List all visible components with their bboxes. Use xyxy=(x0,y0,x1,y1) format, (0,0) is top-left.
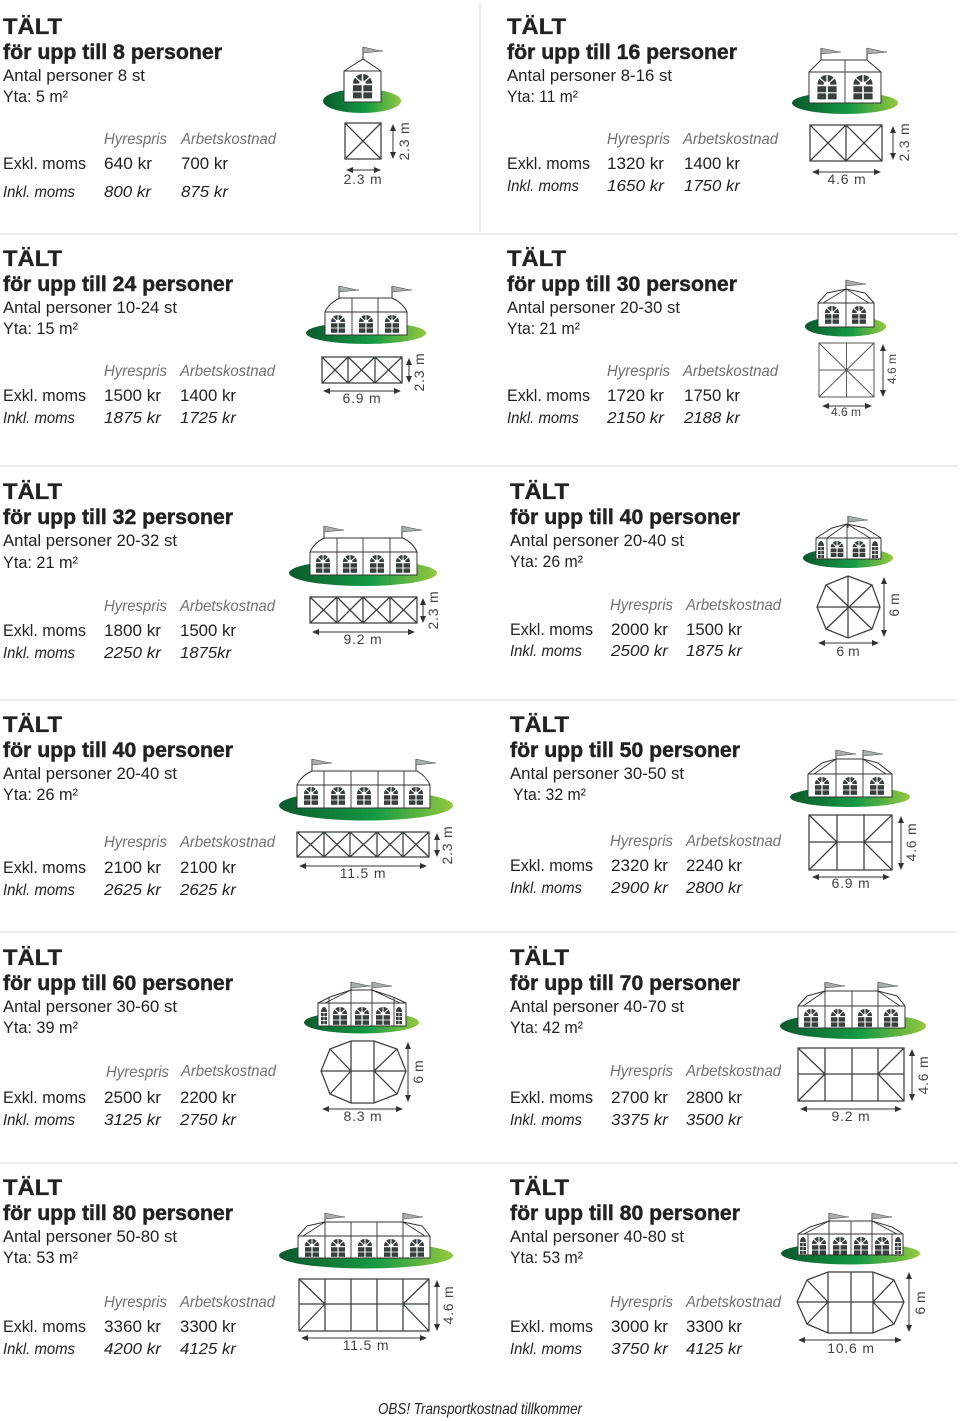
heading: för upp till 30 personer xyxy=(507,273,737,296)
icon: tent xyxy=(279,759,453,820)
floor plan xyxy=(299,1279,456,1353)
price table: Inkl. moms xyxy=(507,178,579,195)
floor plan xyxy=(322,352,427,406)
details: Antal personer 20-32 st xyxy=(3,531,177,550)
details: Yta: 39 m² xyxy=(3,1018,78,1037)
details: Yta: 26 m² xyxy=(3,785,78,804)
price table: Exkl. moms xyxy=(510,856,593,875)
price table: 1500 kr xyxy=(104,386,161,405)
details: Yta: 42 m² xyxy=(510,1018,583,1037)
price table xyxy=(510,1063,782,1129)
heading xyxy=(3,246,233,296)
price table: Hyrespris xyxy=(607,131,670,148)
price table: Arbetskostnad xyxy=(685,1294,782,1311)
icon: tent xyxy=(306,286,426,344)
price table xyxy=(3,1294,276,1358)
price table: Inkl. moms xyxy=(510,1341,582,1358)
price table: Exkl. moms xyxy=(3,621,86,640)
heading: för upp till 70 personer xyxy=(510,972,740,995)
price table: 3500 kr xyxy=(686,1112,743,1129)
heading xyxy=(3,479,233,529)
price table: Exkl. moms xyxy=(507,154,590,173)
price table: 2100 kr xyxy=(104,858,161,877)
details xyxy=(3,298,177,338)
price table: Arbetskostnad xyxy=(179,834,276,851)
heading xyxy=(507,246,737,296)
floor plan: 6.9 m xyxy=(342,390,382,406)
price table: Hyrespris xyxy=(104,363,167,380)
price table: 2200 kr xyxy=(180,1088,236,1107)
price table: Hyrespris xyxy=(104,834,167,851)
details: Antal personer 8-16 st xyxy=(507,66,672,85)
price table: 1720 kr xyxy=(607,386,664,405)
floor plan: 11.5 m xyxy=(343,1337,389,1353)
price table: 1725 kr xyxy=(180,410,237,427)
price table: 2188 kr xyxy=(683,410,741,427)
price table: Hyrespris xyxy=(607,363,670,380)
floor plan: 9.2 m xyxy=(343,631,383,647)
panel: tent for 8 persons xyxy=(3,14,412,201)
price table: Exkl. moms xyxy=(3,858,86,877)
panel: tent for 16 persons xyxy=(507,14,912,195)
price table: 2500 kr xyxy=(610,643,669,660)
price table xyxy=(3,363,276,427)
price table xyxy=(510,1294,782,1358)
floor plan: 2.3 m xyxy=(343,171,383,187)
floor plan: 6 m xyxy=(912,1291,928,1315)
heading: TÄLT xyxy=(507,14,567,39)
price table: Exkl. moms xyxy=(3,386,86,405)
details xyxy=(3,531,177,572)
price table xyxy=(507,363,779,427)
heading xyxy=(3,712,233,762)
price table: Arbetskostnad xyxy=(682,131,779,148)
floor plan: 8.3 m xyxy=(343,1108,383,1124)
details: Antal personer 30-60 st xyxy=(3,997,177,1016)
price table: Arbetskostnad xyxy=(682,363,779,380)
price table: 800 kr xyxy=(104,184,152,201)
footnote: OBS! Transportkostnad tillkommer xyxy=(378,1401,583,1418)
panel: tent for 40 persons, long xyxy=(3,712,455,899)
panel: tent for 80 persons, long xyxy=(3,1175,456,1358)
details: Antal personer 10-24 st xyxy=(3,298,177,317)
details: Antal personer 40-80 st xyxy=(510,1227,684,1246)
details: Antal personer 20-30 st xyxy=(507,298,680,317)
price table: Arbetskostnad xyxy=(180,1063,277,1080)
details: Antal personer 50-80 st xyxy=(3,1227,177,1246)
price table: 4200 kr xyxy=(104,1341,162,1358)
price table: 2500 kr xyxy=(104,1088,161,1107)
floor plan xyxy=(810,122,912,187)
floor plan: 9.2 m xyxy=(831,1108,871,1124)
price table: Exkl. moms xyxy=(510,620,593,639)
price table: Inkl. moms xyxy=(510,1112,582,1129)
details xyxy=(3,1227,177,1267)
heading: för upp till 40 personer xyxy=(3,739,233,762)
price table: 3125 kr xyxy=(104,1112,162,1129)
price table: 4125 kr xyxy=(686,1341,743,1358)
heading: för upp till 40 personer xyxy=(510,506,740,529)
panel: tent for 60 persons xyxy=(3,945,426,1129)
heading: för upp till 50 personer xyxy=(510,739,740,762)
floor plan xyxy=(809,815,919,891)
floor plan: 2.3 m xyxy=(411,352,427,392)
price table: 2900 kr xyxy=(610,880,669,897)
price table: 1800 kr xyxy=(104,621,161,640)
floor plan xyxy=(797,1272,928,1356)
price table: Hyrespris xyxy=(104,598,167,615)
details: Yta: 11 m² xyxy=(507,87,578,106)
price table: 2625 kr xyxy=(103,882,162,899)
details: Yta: 32 m² xyxy=(513,785,586,804)
price table: Hyrespris xyxy=(610,1063,673,1080)
price table: Exkl. moms xyxy=(510,1088,593,1107)
price table: 1650 kr xyxy=(607,178,665,195)
floor plan: 6 m xyxy=(886,593,902,617)
price table: Hyrespris xyxy=(104,131,167,148)
price table: 2320 kr xyxy=(611,856,668,875)
heading: för upp till 32 personer xyxy=(3,506,233,529)
price table xyxy=(510,597,782,660)
floor plan: 6 m xyxy=(836,643,860,659)
price table: 1500 kr xyxy=(180,621,236,640)
price table: Inkl. moms xyxy=(3,184,75,201)
panel: tent for 40 persons, round xyxy=(510,479,902,660)
price table: Inkl. moms xyxy=(3,1112,75,1129)
price table: Exkl. moms xyxy=(3,154,86,173)
details xyxy=(510,997,684,1037)
price table: 640 kr xyxy=(104,154,152,173)
heading xyxy=(510,945,740,995)
floor plan: 2.3 m xyxy=(439,825,455,865)
price table: Hyrespris xyxy=(104,1294,167,1311)
price table: Inkl. moms xyxy=(3,645,75,662)
price table: Inkl. moms xyxy=(510,643,582,660)
price table: Exkl. moms xyxy=(3,1317,86,1336)
icon: tent xyxy=(289,526,437,586)
details: Yta: 21 m² xyxy=(507,319,580,338)
price table: 875 kr xyxy=(181,184,229,201)
heading: TÄLT xyxy=(3,14,63,39)
price table: Inkl. moms xyxy=(3,1341,75,1358)
panel: tent for 70 persons xyxy=(510,945,931,1129)
icon: tent xyxy=(780,982,926,1039)
heading: TÄLT xyxy=(510,945,570,970)
heading xyxy=(3,1175,233,1225)
floor plan xyxy=(310,590,441,647)
heading: TÄLT xyxy=(510,1175,570,1200)
heading: TÄLT xyxy=(510,479,570,504)
icon: tent xyxy=(781,1213,920,1264)
floor plan: 2.3 m xyxy=(425,590,441,630)
floor plan: 4.6 m xyxy=(885,354,899,384)
price table: Arbetskostnad xyxy=(685,597,782,614)
heading: TÄLT xyxy=(507,246,567,271)
price table: Inkl. moms xyxy=(510,880,582,897)
floor plan: 4.6 m xyxy=(827,171,867,187)
floor plan: 4.6 m xyxy=(903,822,919,862)
details: Antal personer 8 st xyxy=(3,66,145,85)
heading: TÄLT xyxy=(3,945,63,970)
details: Yta: 26 m² xyxy=(510,552,583,571)
heading xyxy=(510,712,740,762)
price table: 1750 kr xyxy=(684,178,741,195)
floor plan: 10.6 m xyxy=(827,1340,875,1356)
floor plan xyxy=(819,343,899,419)
price table: Exkl. moms xyxy=(510,1317,593,1336)
details xyxy=(3,764,177,804)
heading: för upp till 24 personer xyxy=(3,273,233,296)
panel: tent for 80 persons, oval xyxy=(510,1175,928,1358)
price table: 2700 kr xyxy=(611,1088,668,1107)
details: Antal personer 40-70 st xyxy=(510,997,684,1016)
price table: Inkl. moms xyxy=(507,410,579,427)
panel: tent for 32 persons xyxy=(3,479,441,662)
heading: för upp till 16 personer xyxy=(507,41,737,64)
heading xyxy=(510,479,740,529)
floor plan xyxy=(798,1048,931,1124)
price table: Hyrespris xyxy=(610,1294,673,1311)
details xyxy=(3,997,177,1037)
details: Yta: 21 m² xyxy=(3,553,78,572)
price table: 2750 kr xyxy=(179,1112,237,1129)
details: Yta: 5 m² xyxy=(3,87,68,106)
price table: Arbetskostnad xyxy=(685,833,782,850)
price table: 2100 kr xyxy=(180,858,236,877)
floor plan: 2.3 m xyxy=(396,121,412,161)
price table: 2800 kr xyxy=(686,1088,742,1107)
details xyxy=(510,531,684,571)
details: Antal personer 30-50 st xyxy=(510,764,684,783)
floor plan xyxy=(297,825,455,881)
price table: Arbetskostnad xyxy=(685,1063,782,1080)
details xyxy=(510,1227,684,1267)
icon: tent xyxy=(792,48,898,114)
details: Antal personer 20-40 st xyxy=(3,764,177,783)
details: Yta: 53 m² xyxy=(3,1248,78,1267)
panel: tent for 30 persons xyxy=(507,246,899,427)
price table: 3300 kr xyxy=(686,1317,742,1336)
heading: TÄLT xyxy=(3,712,63,737)
floor plan xyxy=(321,1041,426,1124)
price table: 1400 kr xyxy=(684,154,740,173)
price table: 2000 kr xyxy=(611,620,668,639)
floor plan: 4.6 m xyxy=(440,1285,456,1325)
price table: 3375 kr xyxy=(611,1112,669,1129)
price table: 1875kr xyxy=(180,645,232,662)
floor plan: 4.6 m xyxy=(915,1055,931,1095)
heading: för upp till 80 personer xyxy=(510,1202,740,1225)
heading: för upp till 8 personer xyxy=(3,41,222,64)
price table: 3300 kr xyxy=(180,1317,236,1336)
details xyxy=(507,298,680,338)
heading: för upp till 60 personer xyxy=(3,972,233,995)
price table xyxy=(3,131,277,201)
floor plan: 6.9 m xyxy=(831,875,871,891)
price table: 2150 kr xyxy=(606,410,665,427)
icon: tent xyxy=(803,516,893,568)
floor plan: 4.6 m xyxy=(831,405,861,419)
price table: 1400 kr xyxy=(180,386,236,405)
price table: Inkl. moms xyxy=(3,410,75,427)
price table: 1875 kr xyxy=(104,410,162,427)
price table: Arbetskostnad xyxy=(180,131,277,148)
price table: 1750 kr xyxy=(684,386,740,405)
icon: tent xyxy=(323,47,401,113)
price table: 4125 kr xyxy=(180,1341,237,1358)
price table: 2240 kr xyxy=(686,856,742,875)
price table: Hyrespris xyxy=(610,597,673,614)
price table xyxy=(510,833,782,897)
panel: tent for 24 persons xyxy=(3,246,427,427)
price table: Arbetskostnad xyxy=(179,363,276,380)
price table: 3750 kr xyxy=(611,1341,669,1358)
price table: Arbetskostnad xyxy=(179,598,276,615)
heading: TÄLT xyxy=(3,1175,63,1200)
floor plan: 2.3 m xyxy=(896,122,912,162)
price table xyxy=(507,131,779,195)
price table: 3000 kr xyxy=(611,1317,668,1336)
panel: tent for 50 persons xyxy=(510,712,919,897)
price table: 2800 kr xyxy=(685,880,743,897)
floor plan xyxy=(817,576,902,659)
price table: 1320 kr xyxy=(607,154,664,173)
heading: TÄLT xyxy=(3,479,63,504)
price table: 1500 kr xyxy=(686,620,742,639)
details: Antal personer 20-40 st xyxy=(510,531,684,550)
price table: 2250 kr xyxy=(103,645,162,662)
heading xyxy=(507,14,737,64)
price table: Hyrespris xyxy=(610,833,673,850)
floor plan: 6 m xyxy=(410,1060,426,1084)
heading xyxy=(3,14,222,64)
price table: 700 kr xyxy=(181,154,228,173)
details: Yta: 15 m² xyxy=(3,319,78,338)
price table: Inkl. moms xyxy=(3,882,75,899)
price table: 3360 kr xyxy=(104,1317,161,1336)
icon: tent xyxy=(304,982,419,1034)
price table: 2625 kr xyxy=(179,882,237,899)
price table xyxy=(3,1063,277,1129)
details xyxy=(510,764,684,804)
icon: tent xyxy=(279,1213,453,1268)
price table: Hyrespris xyxy=(106,1064,169,1081)
icon: tent xyxy=(805,280,886,336)
price table xyxy=(3,598,276,662)
floor plan: 11.5 m xyxy=(340,865,386,881)
heading: TÄLT xyxy=(3,246,63,271)
details: Yta: 53 m² xyxy=(510,1248,583,1267)
details xyxy=(3,66,145,106)
details xyxy=(507,66,672,106)
heading: TÄLT xyxy=(510,712,570,737)
floor plan xyxy=(343,121,412,187)
price table xyxy=(3,834,276,899)
heading: för upp till 80 personer xyxy=(3,1202,233,1225)
heading xyxy=(510,1175,740,1225)
price table: Exkl. moms xyxy=(3,1088,86,1107)
price table: Arbetskostnad xyxy=(179,1294,276,1311)
heading xyxy=(3,945,233,995)
icon: tent xyxy=(790,750,910,807)
price table: Exkl. moms xyxy=(507,386,590,405)
price table: 1875 kr xyxy=(686,643,743,660)
